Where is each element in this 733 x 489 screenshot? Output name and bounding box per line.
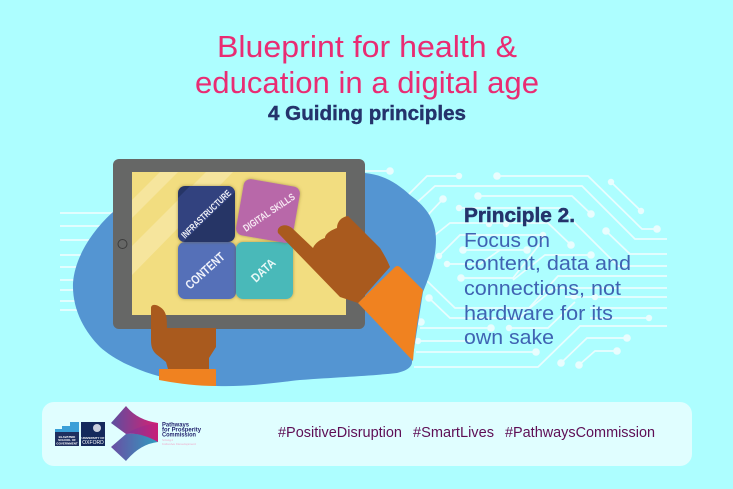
hashtags: #PathwaysCommission [505,424,655,441]
circuit lines left [60,171,390,310]
tile label: digital skills: DIGITAL SKILLS [242,192,298,234]
logo: Pathways mark [111,406,158,461]
tablet screen [132,172,346,315]
right sleeve [358,266,423,361]
principle body: content, data and [464,252,631,275]
tile: content [178,242,236,299]
logo: Pathways wordmark: Pathways [162,423,190,429]
principle body: Focus on [464,229,550,252]
footer background [42,402,692,466]
home button [118,240,127,248]
title: Blueprint for health & [217,29,517,64]
logo: University of Oxford: OXFORD [82,440,104,446]
logo: Blavatnik School of Government: BLAVATNIK [59,435,76,439]
logo: Pathways wordmark [162,423,202,446]
logo: Blavatnik School of Government [55,422,79,446]
tile: infrastructure [178,186,235,242]
principle heading: Principle 2. [464,204,575,227]
title [195,29,539,100]
circuit lines right [405,176,667,367]
tile: data [236,242,293,299]
circuit nodes right [415,172,661,369]
title: education in a digital age [195,65,539,100]
screen glare wide band [132,172,233,275]
right hand [278,216,390,303]
principle body: own sake [464,326,554,349]
logo: Blavatnik School of Government: GOVERNMENT [56,442,78,446]
hashtags: #PositiveDisruption [278,424,402,441]
logo: Blavatnik School of Government: SCHOOL OF [58,438,76,442]
logo: University of Oxford [81,422,105,446]
principle text block [464,204,631,349]
background blob [73,173,436,386]
footer panel [42,402,692,466]
hashtags: #SmartLives [413,424,494,441]
screen glare narrow band [132,172,178,218]
left sleeve [159,369,216,386]
tile label: data: DATA [248,256,279,285]
logo: Pathways wordmark: Commission [162,433,196,439]
left hand [151,305,216,369]
hashtags [278,424,655,441]
principle body: connections, not [464,277,621,300]
tile label: infrastructure: INFRASTRUCTURE [179,188,234,241]
logo: Pathways wordmark: for Prosperity [162,428,202,434]
subtitle: 4 Guiding principles [268,103,466,125]
principle body: hardware for its [464,302,613,325]
tablet body [113,159,365,329]
tile: digital skills [235,178,301,244]
principle body [464,229,631,349]
tablet [113,159,365,329]
logo: University of Oxford: UNIVERSITY OF [82,436,105,440]
tile label: content: CONTENT [183,250,228,292]
circuit node top of tablet [386,167,394,175]
logo: Pathways wordmark: Technology & [162,438,173,442]
logo: Pathways wordmark: Inclusive Development [162,442,196,446]
